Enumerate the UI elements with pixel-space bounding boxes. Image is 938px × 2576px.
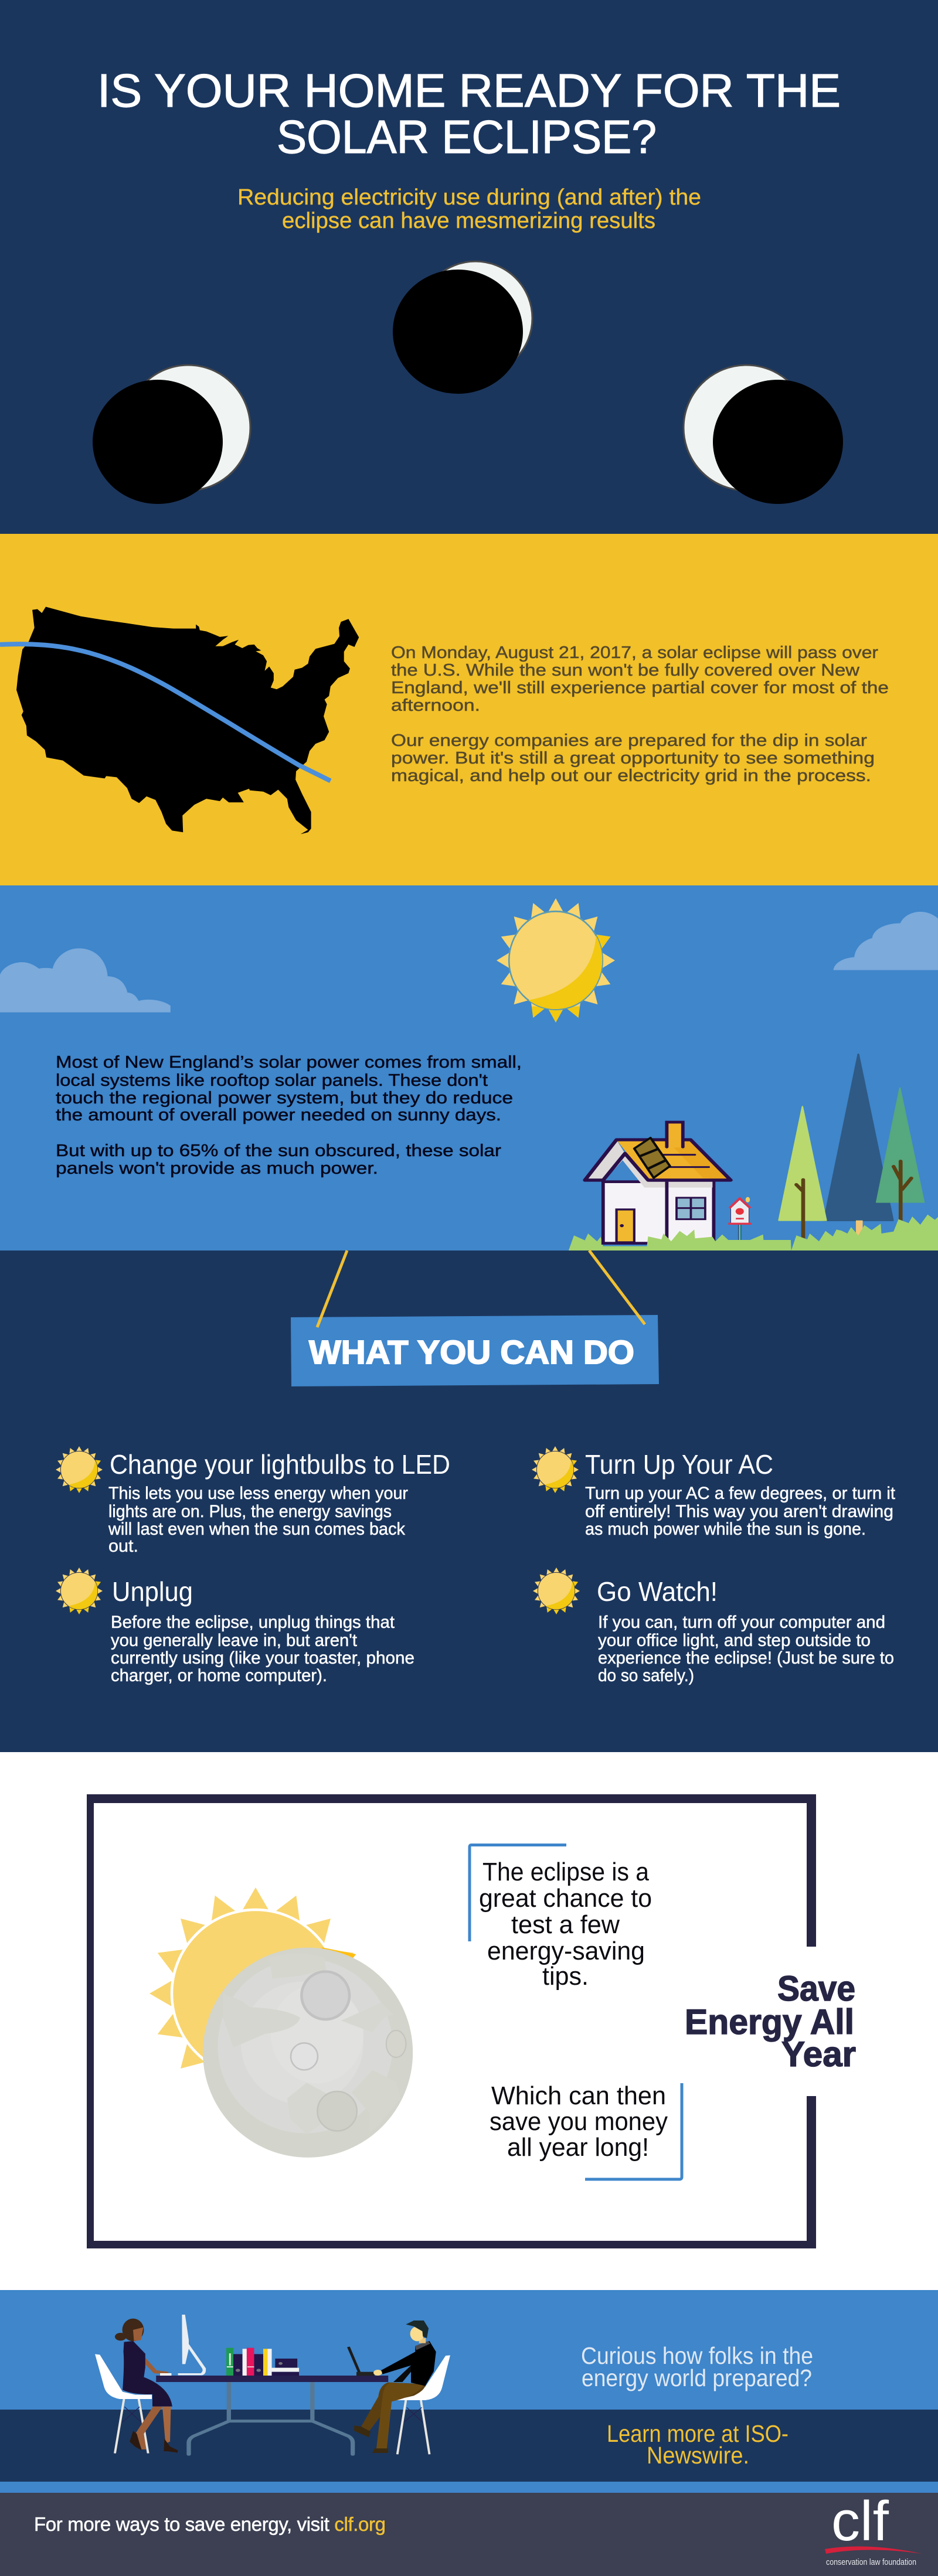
tip: LED lightbulbs: will last even when the sun comes back (108, 1519, 406, 1539)
tip: go watch: If you can, turn off your computer and (598, 1613, 885, 1632)
text block: eclipse date (391, 643, 889, 785)
tip: LED lightbulbs: Change your lightbulbs to LED (110, 1449, 450, 1480)
tip: unplug: charger, or home computer). (111, 1666, 327, 1685)
tip: LED lightbulbs (56, 1446, 450, 1556)
text block: rooftop solar: local systems like rooftop solar panels. These don't (56, 1071, 488, 1090)
text block: rooftop solar (56, 1053, 522, 1178)
tip: turn up AC: Turn Up Your AC (585, 1449, 773, 1480)
text: learn more link (607, 2420, 789, 2469)
logo: conservation law foundation (825, 2490, 922, 2567)
tip: unplug: Before the eclipse, unplug things that (111, 1613, 395, 1632)
panel: how folks prepared (0, 2290, 938, 2493)
title: IS YOUR HOME READY FOR THE (97, 64, 841, 117)
tip: LED lightbulbs: This lets you use less energy when your (108, 1484, 408, 1503)
icon: eclipse centre (393, 261, 532, 394)
map: United States with eclipse path (0, 606, 359, 834)
callout: eclipse tips (470, 1845, 652, 1991)
tip: unplug: you generally leave in, but aren't (111, 1631, 358, 1650)
panel: save energy all year (0, 1752, 938, 2290)
tip: go watch: Go Watch! (597, 1576, 718, 1607)
tip: turn up AC: as much power while the sun is gone. (585, 1519, 866, 1539)
icon: right cloud (833, 912, 938, 970)
callout: eclipse tips: test a few (511, 1910, 620, 1939)
callout: save money: all year long! (507, 2133, 649, 2162)
callout: eclipse tips: energy-saving (487, 1937, 645, 1965)
sign: what you can do: WHAT YOU CAN DO (309, 1334, 634, 1371)
logo: conservation law foundation: clf (831, 2490, 889, 2553)
subtitle: Reducing electricity use during (and after) the (237, 185, 701, 210)
callout: save money: Which can then (491, 2081, 666, 2110)
text block: eclipse date: afternoon. (391, 696, 480, 715)
panel: solar power (0, 885, 938, 1250)
callout: save money: save you money (490, 2107, 668, 2136)
text: curious how folks prepared (581, 2342, 813, 2391)
title (97, 64, 841, 163)
heading: save energy all year: Energy All (685, 2002, 854, 2042)
frame (87, 1794, 816, 2248)
tip: unplug: Unplug (112, 1576, 193, 1607)
tip: go watch: your office light, and step outside to (598, 1631, 871, 1650)
tip: LED lightbulbs: lights are on. Plus, the energy savings (108, 1502, 392, 1521)
panel: header (0, 0, 938, 534)
icon: eclipse right (684, 365, 843, 504)
text: learn more link: Newswire. (647, 2442, 749, 2469)
tip: turn up AC: off entirely! This way you aren't drawing (585, 1502, 893, 1521)
icon: sun (497, 898, 615, 1023)
text: curious how folks prepared: energy world prepared? (582, 2364, 812, 2391)
text block: eclipse date: England, we'll still experience partial cover for most of the (391, 679, 889, 697)
callout: eclipse tips: The eclipse is a (482, 1858, 649, 1886)
illustration: sun behind moon (149, 1887, 413, 2158)
tip: unplug: currently using (like your toaster, phone (111, 1648, 414, 1668)
tip: turn up AC (532, 1446, 896, 1539)
heading: save energy all year: Save (777, 1969, 855, 2008)
panel: eclipse path (0, 534, 938, 885)
text block: rooftop solar: Most of New England’s solar power comes from small, (56, 1053, 522, 1072)
heading: save energy all year (685, 1969, 856, 2074)
text block: rooftop solar: panels won't provide as much power. (56, 1159, 378, 1178)
text block: eclipse date: magical, and help out our electricity grid in the process. (391, 766, 871, 785)
subtitle (237, 185, 701, 233)
text block: eclipse date: Our energy companies are prepared for the dip in solar (391, 731, 867, 750)
tip: go watch: do so safely.) (598, 1666, 694, 1685)
sign: what you can do (291, 1250, 659, 1386)
tip: go watch (533, 1568, 894, 1685)
logo: conservation law foundation: conservation law foundation (826, 2557, 916, 2567)
heading: save energy all year: Year (781, 2035, 856, 2074)
text block: rooftop solar: touch the regional power system, but they do reduce (56, 1089, 513, 1108)
text block: rooftop solar: the amount of overall power needed on sunny days. (56, 1106, 501, 1125)
subtitle: eclipse can have mesmerizing results (282, 209, 655, 233)
tip: go watch: experience the eclipse! (Just be sure to (598, 1648, 894, 1668)
panel: what you can do (0, 1250, 938, 1752)
callout: eclipse tips: great chance to (479, 1884, 652, 1913)
icon: left cloud (0, 948, 171, 1013)
text: curious how folks prepared: Curious how folks in the (581, 2342, 813, 2369)
text: footer call to action: For more ways to save energy, visit clf.org (34, 2513, 386, 2535)
panel: footer (0, 2490, 938, 2576)
callout: save money (490, 2081, 682, 2179)
tip: turn up AC: Turn up your AC a few degrees, or turn it (585, 1484, 896, 1503)
tip: LED lightbulbs: out. (108, 1536, 138, 1556)
title: SOLAR ECLIPSE? (277, 111, 657, 163)
text block: rooftop solar: But with up to 65% of the sun obscured, these solar (56, 1142, 501, 1160)
callout: eclipse tips: tips. (542, 1962, 589, 1991)
icon: eclipse left (93, 365, 250, 504)
illustration: two people at a table (95, 2315, 450, 2454)
text block: eclipse date: On Monday, August 21, 2017, a solar eclipse will pass over (391, 643, 878, 662)
text block: eclipse date: power. But it's still a great opportunity to see something (391, 749, 875, 768)
text: learn more link: Learn more at ISO- (607, 2420, 789, 2447)
illustration: house, birdhouse and trees (569, 1054, 938, 1250)
text block: eclipse date: the U.S. While the sun won't be fully covered over New (391, 661, 860, 680)
tip: unplug (56, 1568, 414, 1685)
